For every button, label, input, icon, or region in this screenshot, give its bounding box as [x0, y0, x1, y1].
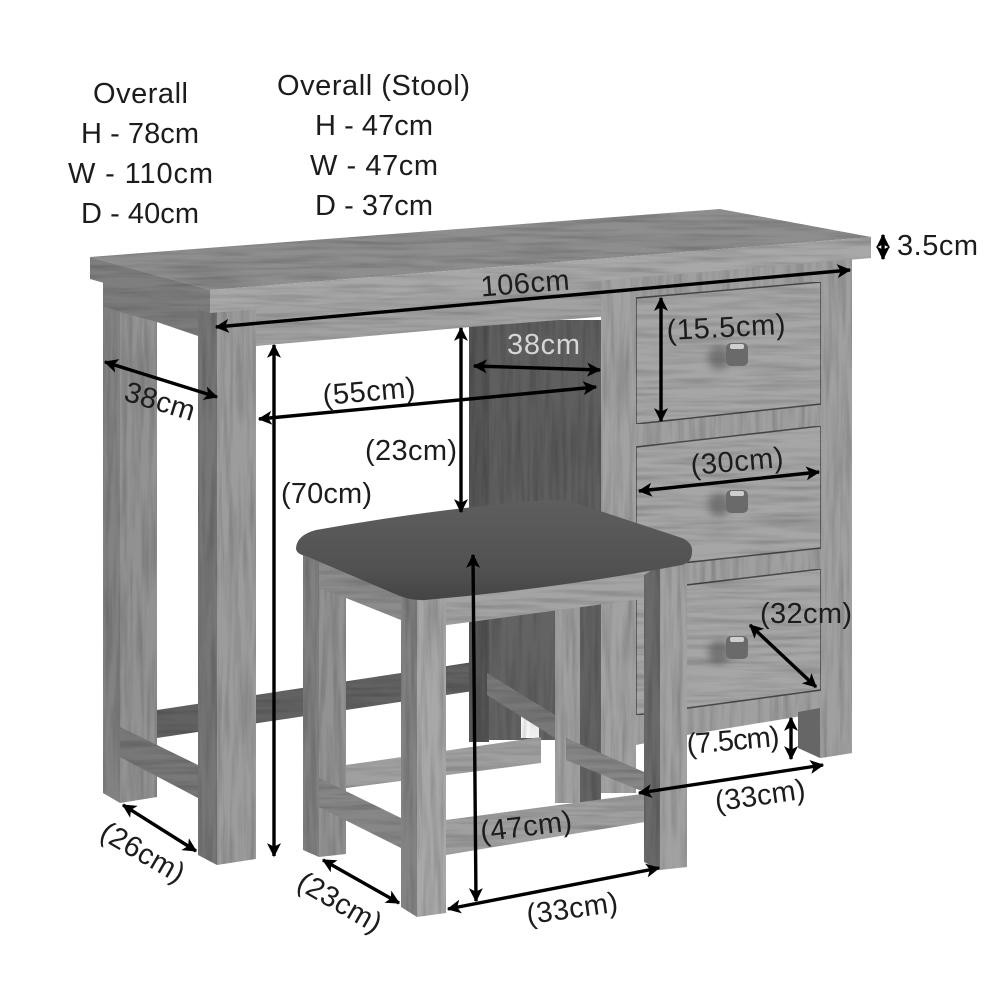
arrow: 38cm pedestal depth [474, 366, 600, 370]
label: 15.5cm: (15.5cm) [666, 309, 786, 347]
arrow: 33cm table foot [639, 765, 823, 793]
arrow: 55cm [259, 387, 596, 419]
arrow: 30cm [639, 472, 819, 491]
table front apron [210, 275, 610, 350]
arrow: 26cm [123, 805, 196, 851]
label: 26cm: (26cm) [95, 816, 190, 890]
arrow: 38cm side [105, 362, 217, 397]
label: 32cm: (32cm) [760, 598, 852, 630]
dimension arrows [105, 235, 883, 909]
dimension labels [95, 230, 978, 940]
overall table dimensions: D - 40cm [81, 198, 199, 230]
table left back leg [103, 280, 157, 803]
label: 3.5cm: 3.5cm [897, 230, 978, 262]
overall stool dimensions [277, 70, 470, 222]
table right back leg shadow [798, 708, 820, 758]
label: 30cm: (30cm) [689, 442, 785, 482]
table front left leg [198, 305, 256, 865]
overall stool dimensions: Overall (Stool) [277, 70, 470, 102]
drawer 1 [636, 282, 821, 424]
label: 70cm: (70cm) [281, 478, 372, 510]
drawer 2 [636, 426, 821, 568]
overall stool dimensions: H - 47cm [315, 110, 433, 142]
label: 23cm stool depth: (23cm) [292, 866, 387, 940]
stool front stretcher [446, 792, 657, 855]
label: 23cm clearance: (23cm) [365, 435, 457, 467]
label: 38cm side: 38cm [121, 376, 199, 428]
table drawer pedestal [601, 250, 852, 793]
stool front right leg [644, 550, 687, 870]
knob 1 [708, 343, 748, 370]
label: 38cm pedestal: 38cm [507, 329, 580, 361]
table pedestal dark back panel [469, 320, 602, 742]
drawer 3 [636, 569, 821, 715]
label: 106cm: 106cm [479, 265, 571, 303]
overall stool dimensions: D - 37cm [315, 190, 433, 222]
table top [90, 209, 871, 313]
overall table dimensions: H - 78cm [81, 118, 199, 150]
stool back left leg [303, 545, 346, 857]
arrow: 70cm [272, 345, 276, 856]
stool [296, 500, 692, 917]
arrow: 23cm stool depth [323, 860, 399, 903]
stool seat cushion [296, 500, 692, 600]
overall table dimensions: W - 110cm [68, 158, 213, 190]
table pedestal diagonal rail [487, 673, 555, 738]
arrow: 47cm [473, 555, 476, 901]
table right front leg [821, 250, 852, 758]
label: 55cm: (55cm) [321, 372, 417, 412]
dressing table [90, 209, 871, 865]
stool right side stretcher [566, 738, 644, 792]
label: 33cm table foot: (33cm) [713, 774, 807, 818]
stool back right leg [555, 605, 601, 803]
arrow: 33cm stool [448, 868, 659, 909]
arrow: 15.5cm [659, 298, 663, 421]
table side lower stretcher [120, 727, 198, 798]
stool side apron [319, 556, 401, 620]
label: 33cm stool: (33cm) [524, 887, 620, 931]
stool front apron [440, 555, 657, 626]
label: 47cm: (47cm) [479, 806, 574, 848]
arrow: 23cm clearance [459, 328, 463, 512]
arrow: 32cm [750, 625, 816, 687]
overall table dimensions [68, 78, 213, 230]
stool left side stretcher [319, 778, 401, 848]
label: 7.5cm: (7.5cm) [685, 721, 781, 761]
table side rail [103, 279, 198, 336]
arrow: 3.5cm [881, 235, 885, 259]
knob 2 [708, 490, 748, 517]
arrow: 7.5cm [789, 718, 793, 759]
overall stool dimensions: W - 47cm [310, 150, 438, 182]
stool back stretcher [346, 737, 541, 788]
knob 3 [708, 636, 748, 664]
table rear stretcher [157, 661, 480, 738]
stool front left leg [401, 585, 446, 917]
arrow: 106cm [216, 270, 850, 327]
overall table dimensions: Overall [93, 78, 188, 110]
